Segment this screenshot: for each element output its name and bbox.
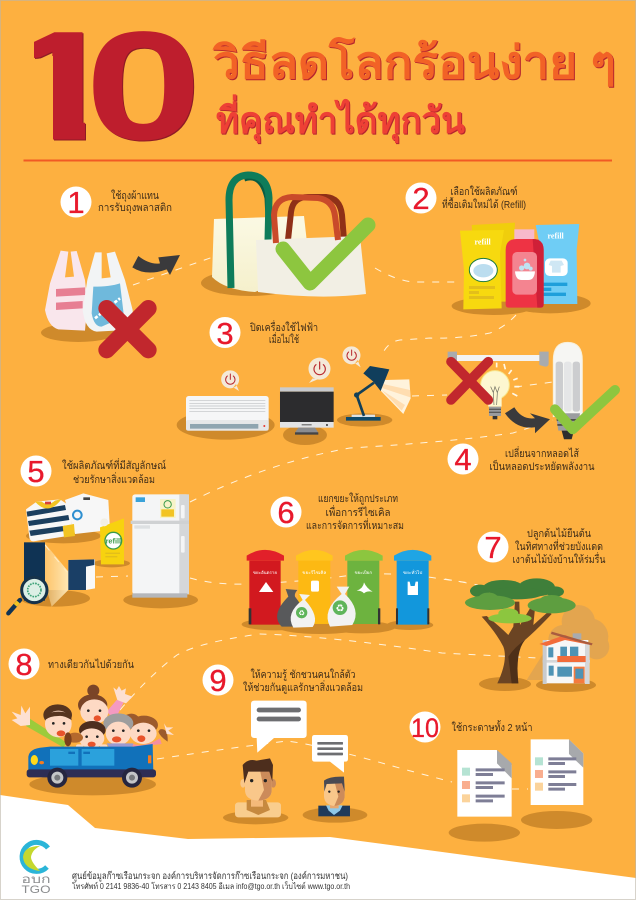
step 2 label: เลือกใช้ผลิตภัณฑ์ xyxy=(450,185,518,198)
icon: tube and incandescent bulb crossed xyxy=(448,352,549,419)
step 9 label: ให้ช่วยกันดูแลรักษาสิ่งแวดล้อม xyxy=(243,680,363,694)
step 10 label: ใช้กระดาษทั้ง 2 หน้า xyxy=(452,720,532,734)
icon: speech bubble large xyxy=(251,701,307,753)
garbage bags: ♻ xyxy=(298,608,305,617)
TGO logo xyxy=(22,842,51,896)
car body xyxy=(28,744,153,772)
step 8 label: ทางเดียวกันไปด้วยกัน xyxy=(48,658,134,671)
icon: desk lamp xyxy=(337,346,411,427)
step 2 label: ที่ซื้อเติมใหม่ได้ (Refill) xyxy=(442,197,526,211)
icon: man large xyxy=(223,758,288,824)
blue bin xyxy=(394,550,431,625)
power bubble xyxy=(221,370,239,391)
step 6 label: และการจัดการที่เหมาะสม xyxy=(306,518,404,532)
step 9 badge xyxy=(202,663,234,698)
girl xyxy=(126,714,174,747)
yellow bin xyxy=(296,550,333,624)
icon: document left xyxy=(449,750,520,842)
icon: refill packs and bottle: refill xyxy=(475,238,492,247)
footer contact text: โทรศัพท์ 0 2141 9836-40 โทรสาร 0 2143 8405 อีเมล info@tgo.or.th เว็บไซต์ www.tgo.or.th xyxy=(72,881,350,891)
icon: computer monitor xyxy=(280,358,334,445)
TGO logo: อบก xyxy=(22,874,50,886)
title line 1: วิธีลดโลกร้อนง่าย ๆ xyxy=(212,36,616,88)
step 5 label: ใช้ผลิตภัณฑ์ที่มีสัญลักษณ์ xyxy=(62,458,166,472)
title number 10: 0 xyxy=(85,0,202,173)
icon: man small xyxy=(303,777,367,823)
boy xyxy=(76,721,107,750)
yellow bin: ขยะรีไซเคิล xyxy=(302,570,327,575)
power bubble xyxy=(342,346,361,367)
dashed connector paths xyxy=(45,257,553,789)
step 9 label: ให้ความรู้ ชักชวนคนใกล้ตัว xyxy=(250,668,356,681)
icon: refill packs and bottle xyxy=(452,223,591,315)
icon: refill eco box: refill xyxy=(106,536,121,545)
tree trunk and branches xyxy=(482,602,552,683)
step 1 label: การรับถุงพลาสติก xyxy=(98,202,172,214)
icon: recycling bins xyxy=(242,550,433,634)
icon: red cross xyxy=(107,308,148,350)
step 1 label xyxy=(98,189,172,214)
icon: green check xyxy=(283,225,368,283)
step 9 label xyxy=(243,668,363,694)
step 1 label: ใช้ถุงผ้าแทน xyxy=(111,189,159,202)
tree shadow on house xyxy=(527,605,609,680)
step 4 label: เป็นหลอดประหยัดพลังงาน xyxy=(490,459,594,473)
step 4 label xyxy=(490,446,594,473)
step 5 badge: 5 xyxy=(27,454,45,489)
step 1 badge: 1 xyxy=(67,185,85,220)
title number 10: 1 xyxy=(4,0,121,173)
green bin xyxy=(345,550,383,624)
step 5 label: ช่วยรักษาสิ่งแวดล้อม xyxy=(73,472,155,486)
arrow: old bulb to CFL xyxy=(505,407,550,433)
footer white band xyxy=(0,795,636,900)
garbage bags xyxy=(277,587,356,628)
step 3 label: ปิดเครื่องใช้ไฟฟ้า xyxy=(250,320,318,334)
step 2 label xyxy=(442,185,526,211)
TGO logo: TGO xyxy=(22,884,51,896)
footer contact text: ศูนย์ข้อมูลก๊าซเรือนกระจก องค์การบริหารจัดการก๊าซเรือนกระจก (องค์การมหาชน) xyxy=(72,870,348,882)
green bin: ขยะเปียก xyxy=(355,570,372,575)
step 7 label: เงาต้นไม้บังบ้านให้ร่มรื่น xyxy=(512,552,606,566)
dog xyxy=(64,732,83,746)
mother xyxy=(78,685,133,724)
step 6 badge xyxy=(270,495,302,530)
step 7 label xyxy=(512,527,606,566)
red bin: ขยะอันตราย xyxy=(253,570,277,575)
icon: plastic bags crossed xyxy=(41,251,148,350)
icon: eco labelled shirts xyxy=(26,493,110,543)
title line 2: ที่คุณทำได้ทุกวัน xyxy=(216,94,465,144)
garbage bags: ♻ xyxy=(336,603,345,614)
arrow: bags to totes xyxy=(132,255,180,275)
step 3 badge: 3 xyxy=(216,316,234,351)
icon: red cross xyxy=(451,362,488,400)
step 6 label: เพื่อการรีไซเคิล xyxy=(326,505,390,519)
step 1 badge xyxy=(60,185,92,220)
icon: energy saving bulb with check xyxy=(553,342,615,439)
step 2 badge xyxy=(406,181,436,216)
step 3 label: เมื่อไม่ใช้ xyxy=(269,332,299,346)
red bin xyxy=(247,550,284,625)
step 2 badge: 2 xyxy=(412,181,430,216)
footer contact text xyxy=(72,870,350,891)
step 7 badge: 7 xyxy=(484,530,502,565)
father xyxy=(12,704,72,747)
title divider xyxy=(24,160,612,162)
grandmother xyxy=(103,713,133,749)
step 4 badge: 4 xyxy=(454,442,472,477)
tree canopy xyxy=(465,578,576,623)
icon: family in blue car xyxy=(12,685,174,795)
icon: air conditioner xyxy=(177,370,275,440)
icon: tree shading house xyxy=(465,578,609,692)
step 3 label xyxy=(250,320,318,346)
step 10 badge: 10 xyxy=(411,713,439,743)
icon: books and magnifier xyxy=(8,542,95,613)
step 4 label: เปลี่ยนจากหลอดไส้ xyxy=(505,446,579,460)
icon: speech bubble small xyxy=(312,735,348,773)
step 9 badge: 9 xyxy=(209,663,227,698)
step 8 badge xyxy=(8,647,40,682)
step 6 badge: 6 xyxy=(277,495,295,530)
step 7 badge xyxy=(478,530,508,565)
step 7 label: ปลูกต้นไม้ยืนต้น xyxy=(527,527,591,540)
step 5 label xyxy=(62,458,166,486)
step 7 label: ในทิศทางที่ช่วยบังแดด xyxy=(515,539,603,553)
power bubble xyxy=(308,358,330,383)
blue bin: ขยะทั่วไป xyxy=(403,569,423,575)
step 3 badge xyxy=(210,316,240,351)
icon: cloth tote bags with check xyxy=(201,175,368,297)
step 6 label xyxy=(306,492,404,532)
step 5 badge xyxy=(20,454,52,489)
icon: refrigerator xyxy=(123,494,198,608)
icon: green check xyxy=(555,390,615,429)
step 6 label: แยกขยะให้ถูกประเภท xyxy=(318,492,398,505)
icon: refill packs and bottle: refill xyxy=(548,232,565,241)
title number 10 xyxy=(34,31,194,142)
step 4 badge xyxy=(448,442,478,477)
house xyxy=(539,632,593,684)
icon: document right xyxy=(521,739,592,829)
step 8 badge: 8 xyxy=(15,647,33,682)
icon: refill eco box xyxy=(93,518,130,567)
